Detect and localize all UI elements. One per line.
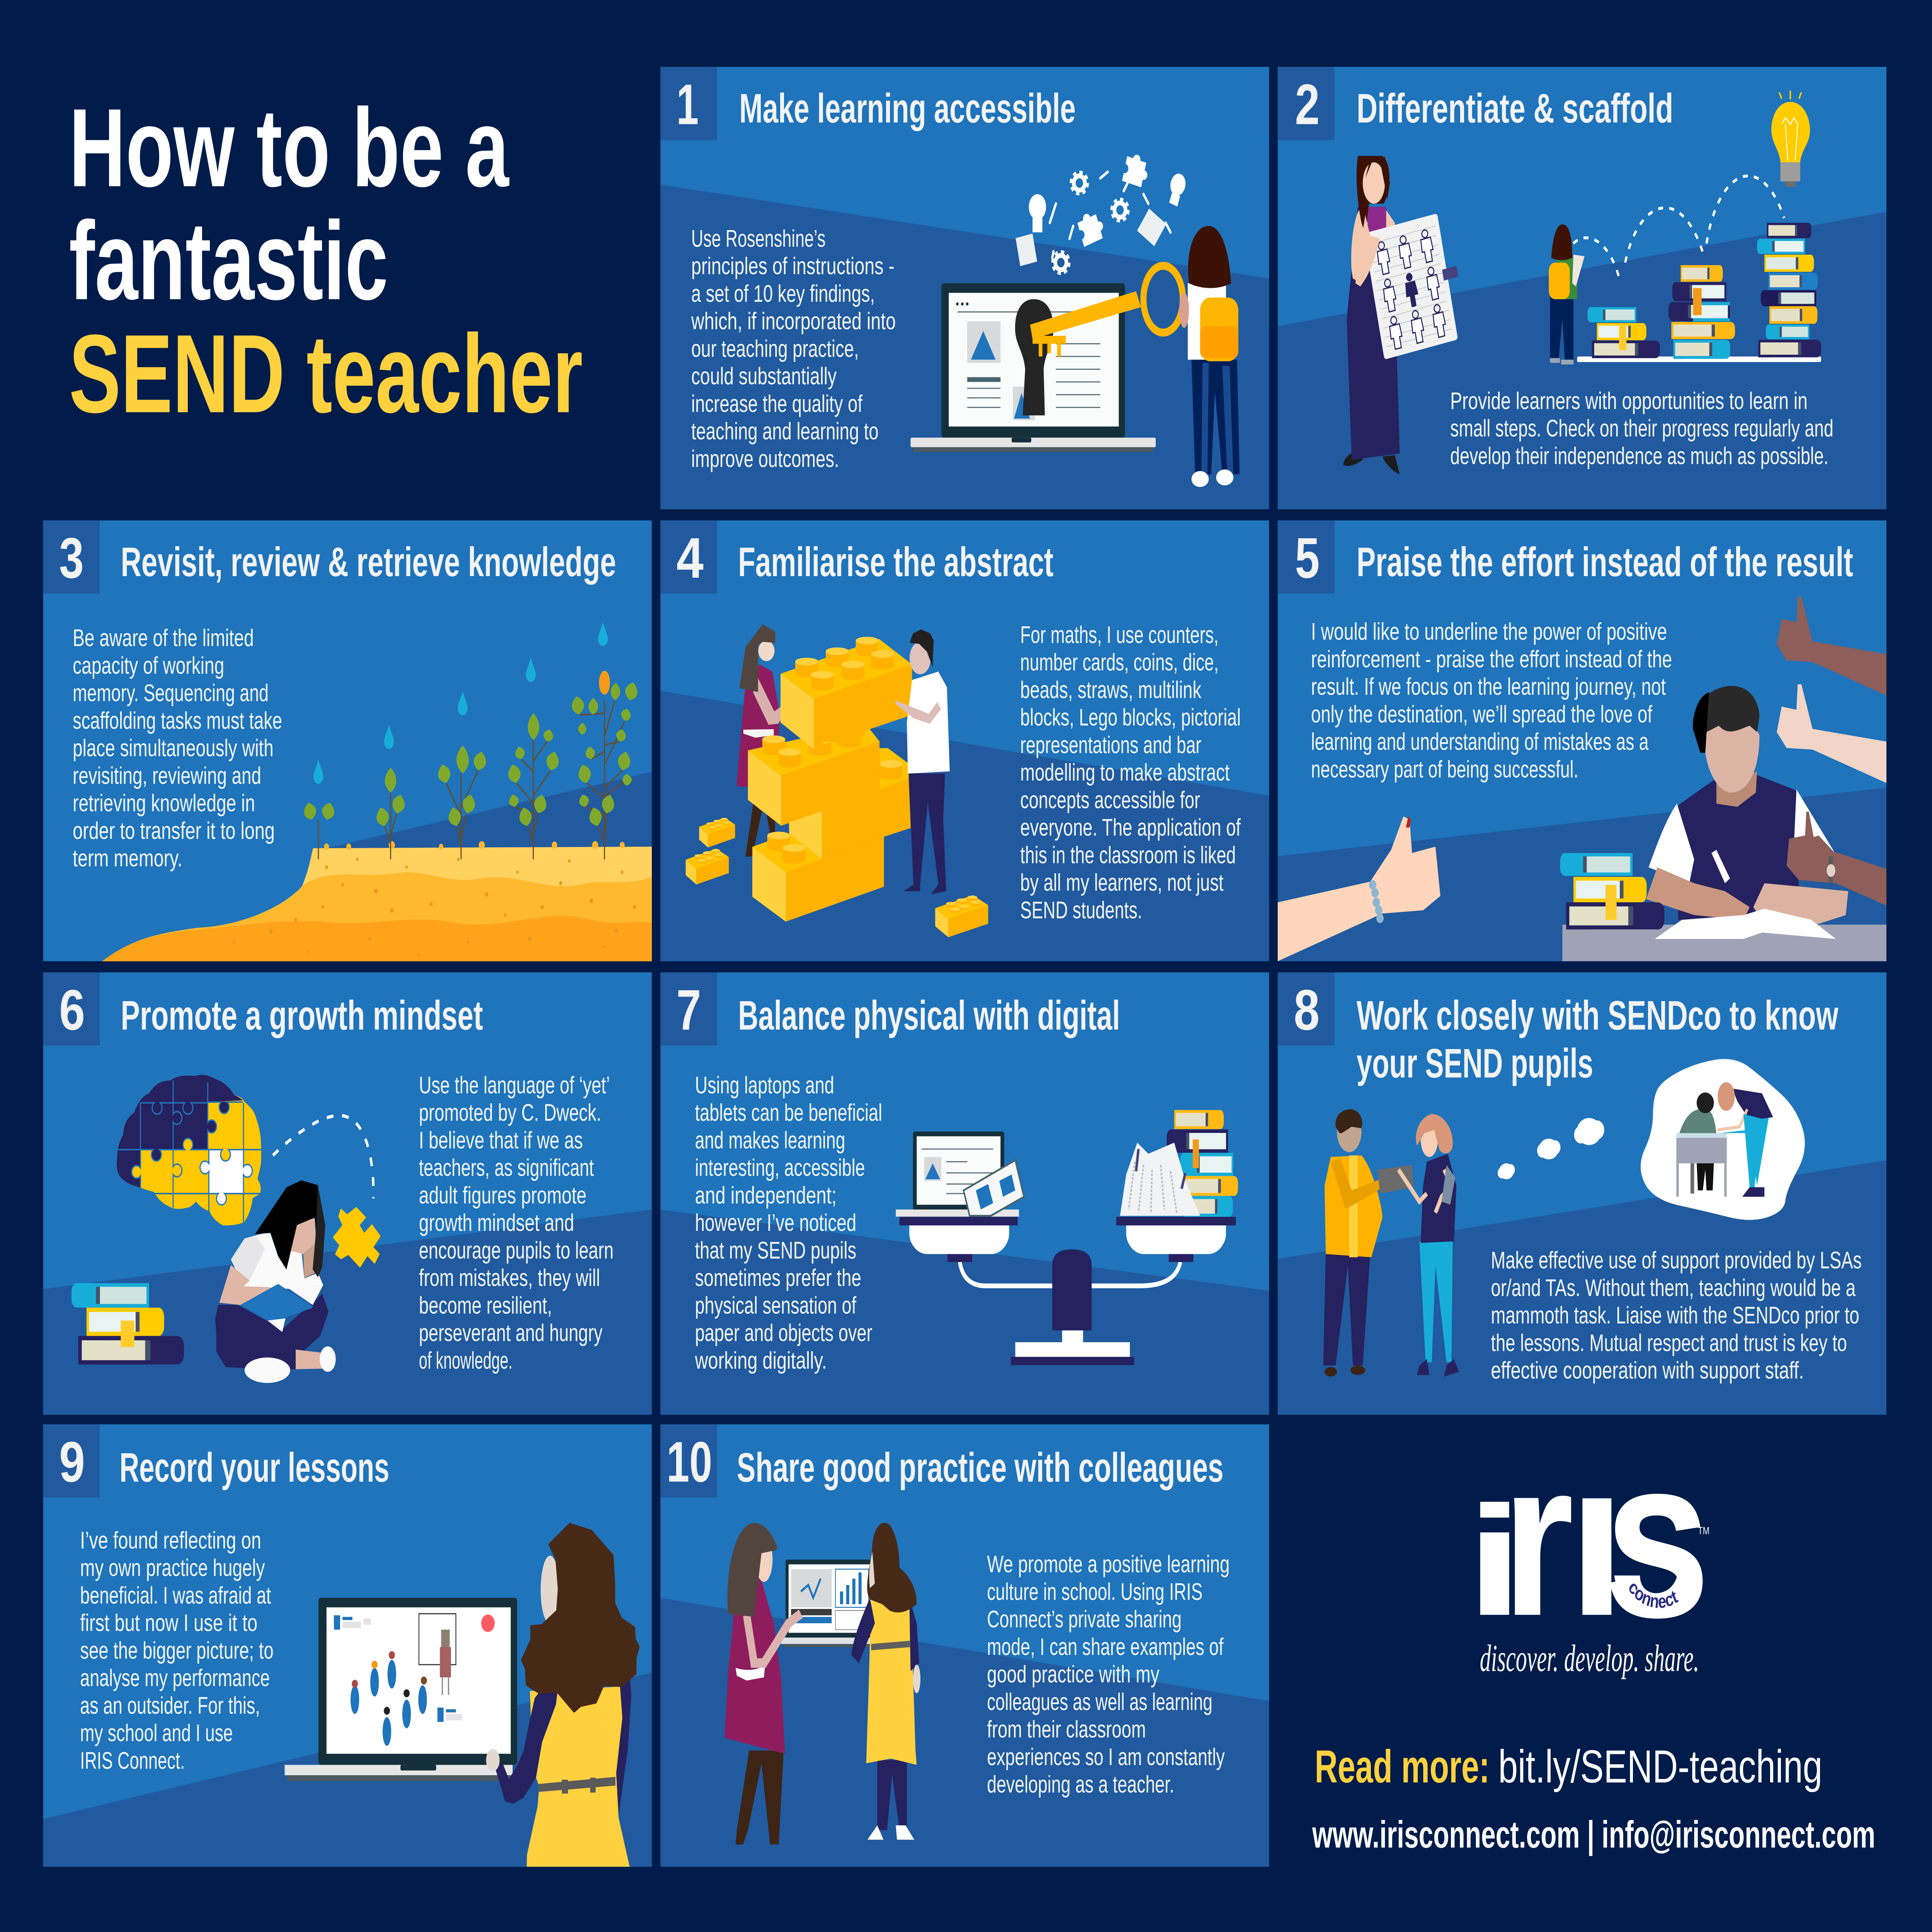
text block 5: result. If we focus on the learning journey, not — [1311, 673, 1666, 700]
growing plants — [302, 671, 639, 859]
title: SEND teacher — [69, 311, 583, 436]
laptop with keyhole — [911, 283, 1156, 452]
text block 1 — [691, 225, 896, 472]
text block 5: necessary part of being successful. — [1311, 756, 1578, 782]
number 7: 7 — [677, 978, 701, 1042]
text block 9: I’ve found reflecting on — [80, 1527, 261, 1554]
girl reading — [215, 1180, 336, 1383]
lego tower — [748, 637, 912, 922]
heading 1: Make learning accessible — [739, 85, 1076, 132]
text block 7: interesting, accessible — [695, 1154, 865, 1181]
text block 8: Make effective use of support provided by LSAs — [1491, 1247, 1862, 1274]
text block 6: Use the language of ‘yet’ — [419, 1072, 610, 1099]
number 10: 10 — [667, 1430, 712, 1494]
text block 7: Using laptops and — [695, 1072, 834, 1099]
heading 8: Work closely with SENDco to know — [1357, 993, 1838, 1039]
text block 6: teachers, as significant — [419, 1154, 594, 1181]
woman — [736, 624, 800, 857]
water drops — [313, 621, 608, 784]
heading 10: Share good practice with colleagues — [737, 1444, 1223, 1491]
text block 9: first but now I use it to — [80, 1609, 257, 1636]
text block 6: promoted by C. Dweck. — [419, 1099, 601, 1126]
text block 9: as an outsider. For this, — [80, 1692, 260, 1719]
text block 10: good practice with my — [987, 1661, 1160, 1688]
text block 10: from their classroom — [987, 1716, 1146, 1743]
text block 6: adult figures promote — [419, 1182, 587, 1209]
classroom scene in bubble — [1676, 1082, 1773, 1197]
text block 5: I would like to underline the power of positive — [1311, 618, 1667, 645]
text block 1: improve outcomes. — [691, 445, 839, 472]
text block 7: however I’ve noticed — [695, 1209, 856, 1236]
text block 1: teaching and learning to — [691, 418, 879, 445]
text block 2 — [1450, 388, 1833, 469]
text block 3: revisiting, reviewing and — [73, 762, 261, 789]
text block 6: of knowledge. — [419, 1347, 513, 1374]
heading 8 — [1357, 993, 1838, 1087]
number 6: 6 — [59, 978, 85, 1042]
text block 4: For maths, I use counters, — [1020, 621, 1219, 648]
text block 8: or/and TAs. Without them, teaching would be a — [1491, 1274, 1856, 1301]
hand: top thumbs up — [1777, 597, 1886, 696]
read more link: bit.ly/SEND-teaching — [1498, 1740, 1822, 1793]
text block 1: a set of 10 key findings, — [691, 280, 875, 307]
text block 4 — [1020, 621, 1241, 923]
text block 5: reinforcement - praise the effort instead of the — [1311, 646, 1672, 672]
panel 6: promote a growth mindset — [43, 972, 652, 1415]
teacher watching from behind — [486, 1525, 638, 1867]
icon: light bulb — [1771, 91, 1810, 187]
student writing — [1562, 686, 1886, 961]
text block 9: analyse my performance — [80, 1665, 270, 1691]
text block 1: principles of instructions - — [691, 253, 895, 279]
heading 8: your SEND pupils — [1357, 1040, 1593, 1087]
icon: yellow puzzle piece — [334, 1208, 380, 1267]
icon: puzzle brain — [116, 1075, 261, 1225]
hand: right thumbs up with watch — [1787, 811, 1886, 905]
text block 3: Be aware of the limited — [73, 624, 254, 651]
text block 2: develop their independence as much as possible. — [1450, 442, 1828, 469]
woman colleague — [1398, 1114, 1459, 1377]
heading 6: Promote a growth mindset — [121, 993, 483, 1039]
panel 2: differentiate and scaffold — [1278, 67, 1886, 509]
IRIS Connect logo — [1466, 1414, 1709, 1662]
text block 7 — [695, 1072, 882, 1374]
text block 6: encourage pupils to learn — [419, 1237, 614, 1264]
text block 4: modelling to make abstract — [1020, 759, 1230, 786]
text block 8: mammoth task. Liaise with the SENDco prior to — [1491, 1302, 1859, 1328]
contact details: www.irisconnect.com | info@irisconnect.com — [1312, 1813, 1875, 1856]
text block 3: order to transfer it to long — [73, 817, 275, 844]
text block 8: the lessons. Mutual respect and trust is key to — [1491, 1329, 1847, 1356]
text block 1: Use Rosenshine’s — [691, 225, 825, 252]
text block 10: Connect’s private sharing — [987, 1606, 1182, 1633]
text block 4: this in the classroom is liked — [1020, 842, 1236, 868]
text block 7: working digitally. — [695, 1347, 827, 1374]
read more link — [1315, 1740, 1822, 1793]
text block 10: We promote a positive learning — [987, 1551, 1230, 1578]
text block 7: that my SEND pupils — [695, 1237, 856, 1264]
text block 3: term memory. — [73, 845, 182, 872]
text block 4: SEND students. — [1020, 897, 1142, 923]
text block 6: growth mindset and — [419, 1209, 574, 1236]
text block 9: beneficial. I was afraid at — [80, 1582, 271, 1609]
panel 8: work closely with SENDco — [1278, 972, 1886, 1415]
IRIS Connect logo: r — [1502, 1414, 1574, 1662]
text block 8: effective cooperation with support staff. — [1491, 1357, 1804, 1384]
text block 6: perseverant and hungry — [419, 1320, 603, 1346]
IRIS Connect logo: i — [1466, 1474, 1524, 1648]
text block 10: mode, I can share examples of — [987, 1633, 1224, 1660]
text block 2: Provide learners with opportunities to learn in — [1450, 388, 1808, 414]
text block 4: concepts accessible for — [1020, 787, 1200, 813]
text block 9: my school and I use — [80, 1719, 233, 1747]
dashed path — [273, 1116, 373, 1198]
number 8: 8 — [1294, 978, 1320, 1042]
heading 4: Familiarise the abstract — [738, 539, 1053, 585]
text block 9: IRIS Connect. — [80, 1747, 185, 1774]
text block 3: capacity of working — [73, 652, 224, 679]
text block 4: by all my learners, not just — [1020, 869, 1223, 896]
panel 10: share good practice — [660, 1424, 1269, 1867]
tagline: discover. develop. share. — [1480, 1637, 1699, 1680]
text block 4: representations and bar — [1020, 731, 1201, 758]
heading 2: Differentiate & scaffold — [1357, 85, 1673, 132]
text block 1: increase the quality of — [691, 390, 863, 417]
text block 10 — [987, 1551, 1230, 1798]
panel 1: make learning accessible — [660, 67, 1269, 509]
text block 3 — [73, 624, 282, 872]
text block 3: scaffolding tasks must take — [73, 707, 282, 734]
icon: floating ideas — [1015, 151, 1188, 273]
book stack — [71, 1283, 184, 1364]
heading 7: Balance physical with digital — [738, 993, 1120, 1039]
text block 10: culture in school. Using IRIS — [987, 1578, 1202, 1605]
hand: left thumbs up — [1278, 816, 1440, 961]
title — [69, 85, 583, 436]
text block 4: everyone. The application of — [1020, 814, 1241, 841]
books and papers — [1120, 1110, 1238, 1217]
panel 5: praise the effort — [1278, 520, 1886, 961]
text block 10: colleagues as well as learning — [987, 1689, 1213, 1715]
teacher holding notebook — [1343, 156, 1468, 474]
panel 9: record your lessons — [43, 1424, 652, 1867]
number 2: 2 — [1295, 73, 1320, 137]
text block 7: and independent; — [695, 1182, 837, 1209]
balance scale — [900, 1217, 1236, 1365]
text block 5: learning and understanding of mistakes as a — [1311, 728, 1649, 755]
IRIS Connect logo: S — [1608, 1461, 1707, 1651]
text block 7: sometimes prefer the — [695, 1264, 861, 1291]
IRIS Connect logo: I — [1569, 1462, 1625, 1651]
panel 7: balance physical with digital — [660, 972, 1269, 1415]
text block 10: experiences so I am constantly — [987, 1743, 1225, 1770]
text block 4: blocks, Lego blocks, pictorial — [1020, 704, 1241, 731]
heading 5: Praise the effort instead of the result — [1357, 539, 1853, 585]
text block 10: developing as a teacher. — [987, 1771, 1174, 1798]
text block 3: place simultaneously with — [73, 735, 274, 762]
text block 3: memory. Sequencing and — [73, 680, 269, 706]
text block 7: physical sensation of — [695, 1292, 857, 1319]
laptop showing classroom — [285, 1598, 517, 1781]
text block 6: become resilient, — [419, 1292, 552, 1319]
text block 7: and makes learning — [695, 1127, 845, 1153]
text block 5: only the destination, we’ll spread the love of — [1311, 701, 1653, 728]
text block 4: number cards, coins, dice, — [1020, 649, 1219, 676]
small lego bricks — [686, 818, 988, 937]
woman pointing — [724, 1523, 801, 1844]
title: fantastic — [69, 199, 388, 323]
sand ground — [102, 841, 652, 961]
woman in yellow dress — [851, 1523, 920, 1840]
hand: middle thumbs up — [1777, 684, 1886, 783]
text block 7: paper and objects over — [695, 1320, 872, 1346]
IRIS Connect logo: TM — [1698, 1525, 1709, 1537]
student with backpack — [1549, 224, 1585, 364]
book stack — [1560, 853, 1664, 929]
read more link: Read more: — [1315, 1740, 1490, 1793]
number 5: 5 — [1295, 526, 1320, 590]
panel 3: revisit review retrieve — [43, 520, 652, 961]
panel 4: familiarise the abstract — [660, 520, 1269, 961]
number 4: 4 — [677, 526, 704, 590]
key — [1030, 266, 1183, 357]
text block 7: tablets can be beneficial — [695, 1099, 882, 1126]
teacher with backpack — [1179, 226, 1240, 487]
laptop and tablet — [896, 1131, 1024, 1217]
book stacks — [1577, 223, 1821, 362]
text block 6 — [419, 1072, 614, 1374]
text block 6: I believe that if we as — [419, 1127, 583, 1153]
text block 2: small steps. Check on their progress regularly and — [1450, 415, 1833, 442]
heading 3: Revisit, review & retrieve knowledge — [121, 539, 616, 585]
number 1: 1 — [677, 73, 699, 137]
text block 5 — [1311, 618, 1672, 782]
dashed jumps — [1573, 176, 1784, 282]
number 3: 3 — [59, 526, 84, 590]
text block 9: see the bigger picture; to — [80, 1637, 274, 1664]
text block 4: beads, straws, multilink — [1020, 677, 1201, 703]
text block 1: could substantially — [691, 363, 837, 389]
text block 9 — [80, 1527, 274, 1774]
text block 1: our teaching practice, — [691, 335, 859, 362]
heading 9: Record your lessons — [119, 1444, 389, 1491]
text block 6: from mistakes, they will — [419, 1264, 600, 1291]
text block 3: retrieving knowledge in — [73, 790, 255, 816]
title: How to be a — [69, 85, 509, 210]
IRIS Connect logo: connect — [1625, 1577, 1680, 1612]
man — [895, 629, 950, 895]
text block 8 — [1491, 1247, 1862, 1384]
text block 1: which, if incorporated into — [691, 308, 896, 335]
number 9: 9 — [59, 1430, 85, 1494]
text block 9: my own practice hugely — [80, 1554, 265, 1581]
man with tablet — [1323, 1109, 1413, 1377]
thought bubbles — [1498, 1059, 1805, 1220]
laptop with charts — [779, 1560, 880, 1647]
